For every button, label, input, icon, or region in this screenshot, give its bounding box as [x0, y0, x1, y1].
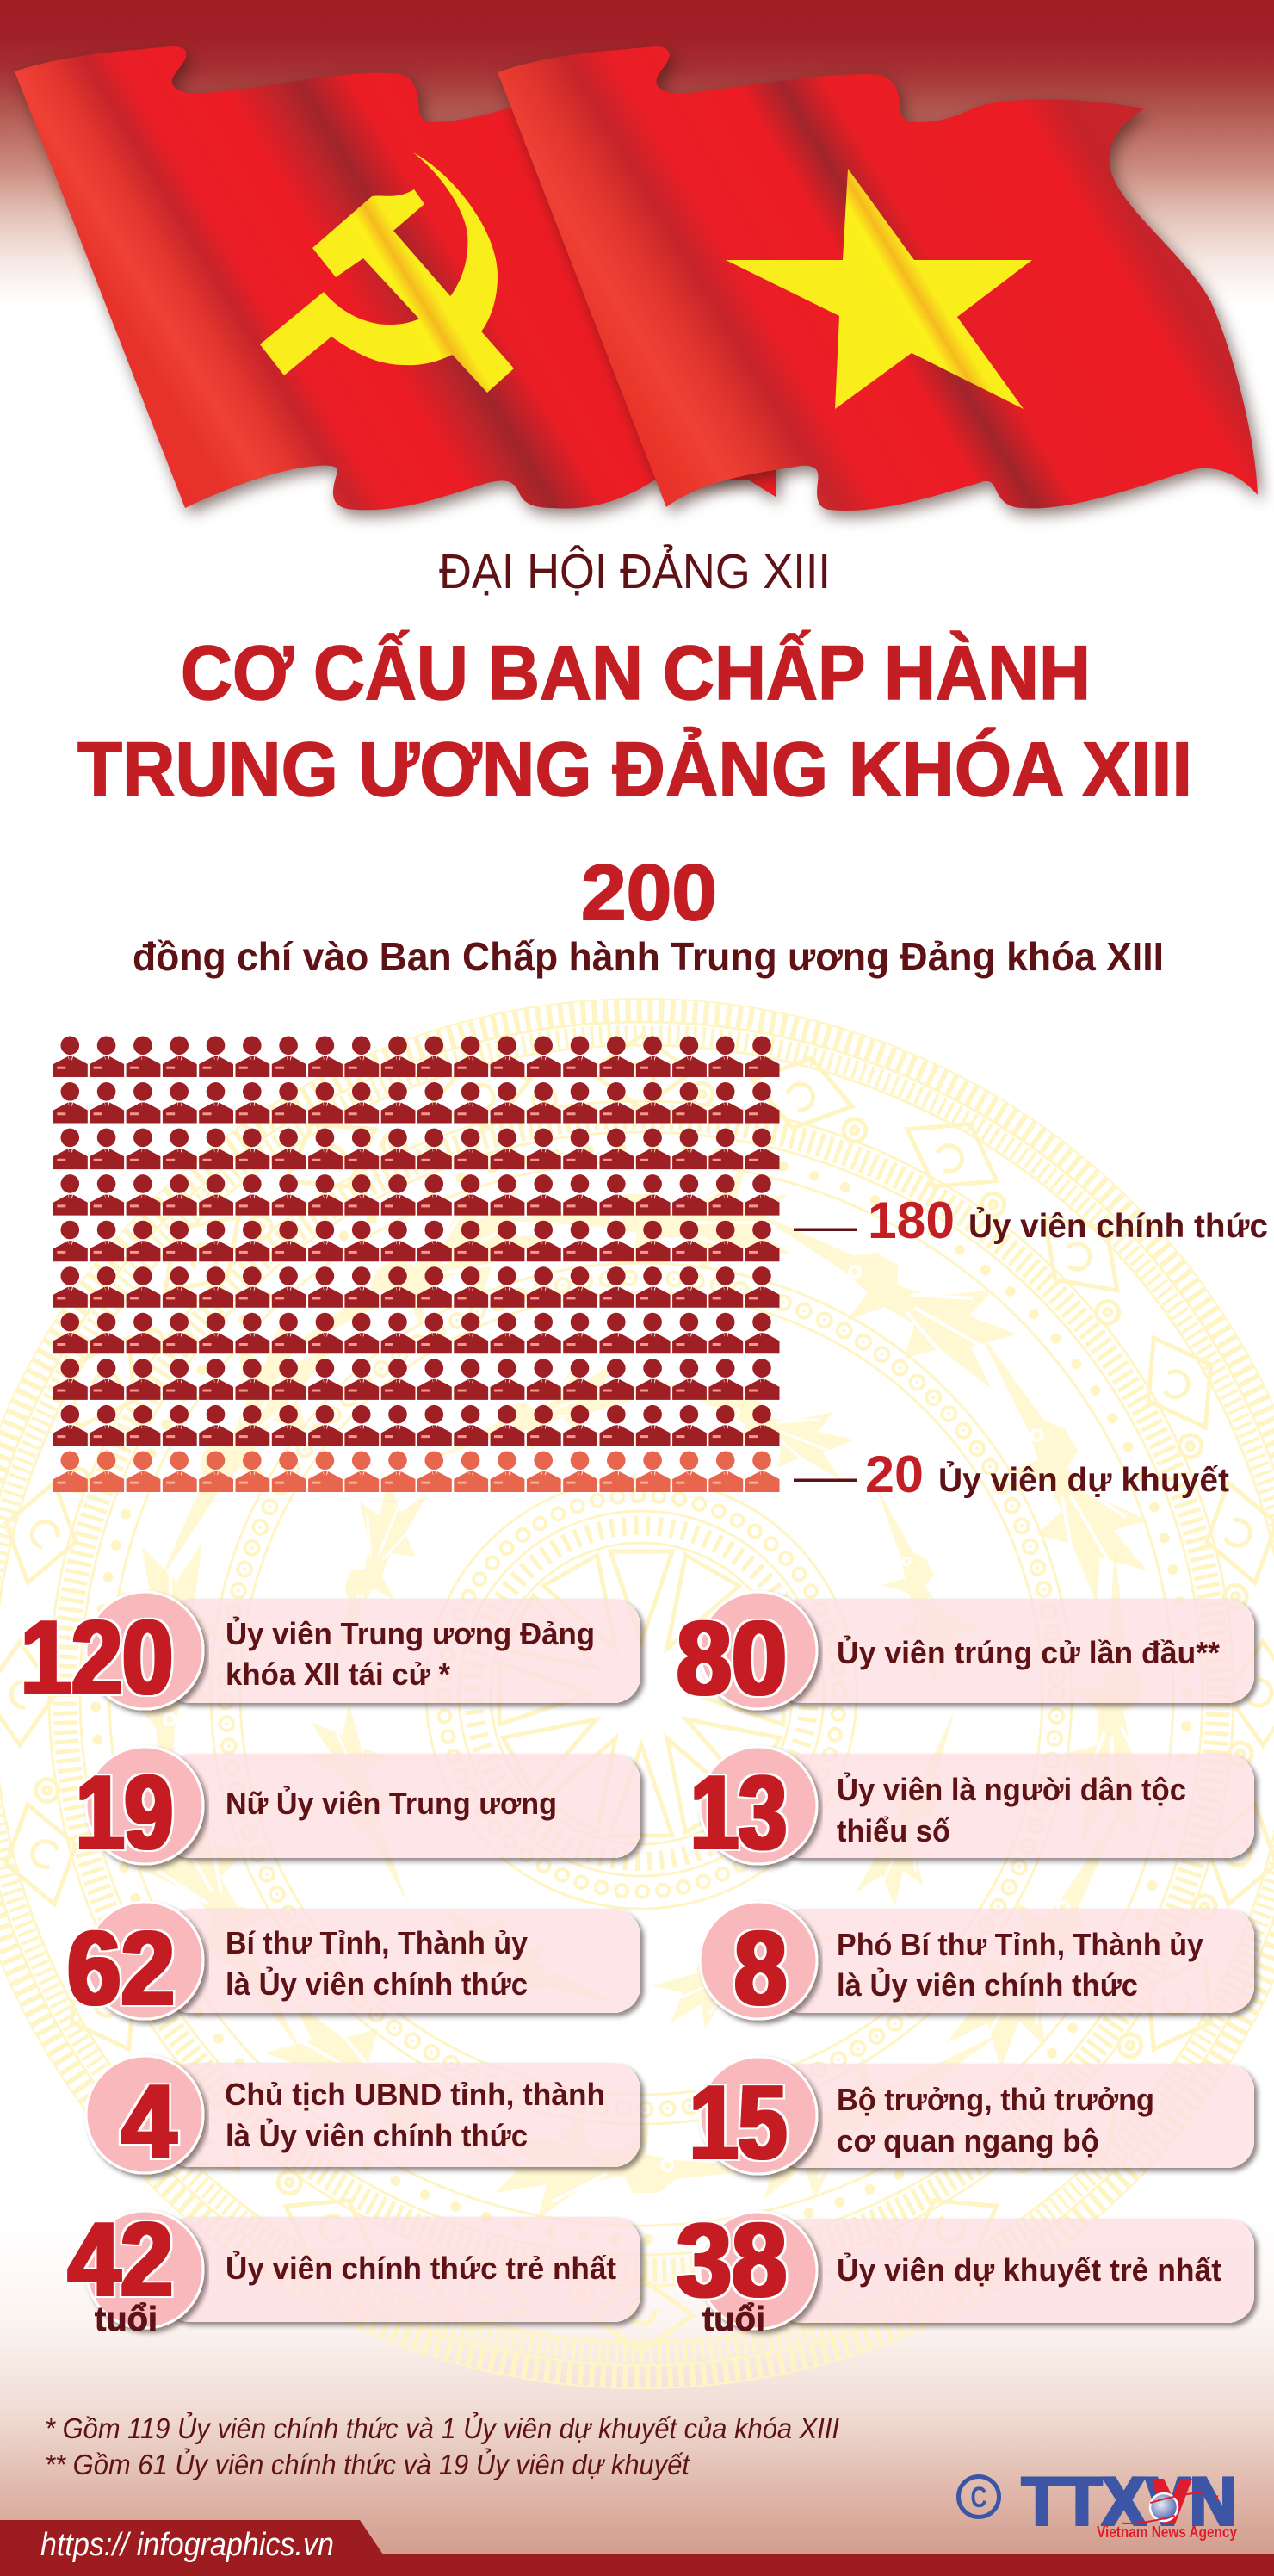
- footer bar with URL: [0, 2520, 1274, 2576]
- heading: congress label: ĐẠI HỘI ĐẢNG XIII: [439, 543, 831, 599]
- stat card: 15: Bộ trưởng, thủ trưởng: [837, 2082, 1154, 2117]
- stat card: 13: Ủy viên là người dân tộc: [837, 1771, 1186, 1807]
- stat card: 8: 8: [734, 1910, 787, 2027]
- stat card: 120: Ủy viên Trung ương Đảng: [226, 1615, 595, 1651]
- callout: 20 alternate members: 20: [865, 1446, 924, 1503]
- stat card: 80: [677, 1592, 1254, 1717]
- icon: copyright symbol: [959, 2476, 999, 2517]
- stat card: 42 years old: 42: [68, 2201, 173, 2318]
- footnotes: [45, 2412, 839, 2480]
- title: TRUNG ƯƠNG ĐẢNG KHÓA XIII: [77, 726, 1192, 812]
- footnotes: ** Gồm 61 Ủy viên chính thức và 19 Ủy viên dự khuyết: [45, 2448, 691, 2480]
- total count: [133, 849, 1164, 979]
- stat card: 15: [690, 2057, 1254, 2181]
- stat card: 8: là Ủy viên chính thức: [837, 1966, 1138, 2003]
- callout: 20 alternate members: Ủy viên dự khuyết: [938, 1461, 1229, 1499]
- flag: Communist Party flag with hammer and sickle: [15, 46, 776, 510]
- stat card: 62: [67, 1902, 640, 2027]
- total count: 200: [581, 849, 717, 937]
- icon: gold star: [726, 169, 1032, 409]
- stat card: 4: 4: [121, 2063, 176, 2180]
- stat card: 38 years old: tuổi: [702, 2300, 765, 2338]
- flag: Vietnam national flag with gold star: [498, 46, 1258, 511]
- callout: 20 alternate members: [794, 1446, 1229, 1503]
- stat card: 15: 15: [690, 2064, 787, 2181]
- footnotes: * Gồm 119 Ủy viên chính thức và 1 Ủy viên dự khuyết của khóa XIII: [45, 2412, 839, 2444]
- logo: TTXVN Vietnam News Agency: TTXVN: [1022, 2463, 1237, 2541]
- pictogram: 200 members grid: [53, 1037, 780, 1492]
- total count: đồng chí vào Ban Chấp hành Trung ương Đảng khóa XIII: [133, 934, 1164, 979]
- stat card: 80: Ủy viên trúng cử lần đầu**: [837, 1634, 1220, 1670]
- stat card: 38 years old: 38: [677, 2201, 787, 2319]
- title: [77, 629, 1192, 812]
- callout: 180 official members: 180: [868, 1192, 955, 1249]
- stat card: 120: khóa XII tái cử *: [226, 1656, 450, 1692]
- stat card: 62: Bí thư Tỉnh, Thành ủy: [226, 1925, 528, 1960]
- stat card: 62: 62: [67, 1910, 175, 2027]
- stat card: 38 years old: [677, 2201, 1254, 2338]
- title: CƠ CẤU BAN CHẤP HÀNH: [181, 629, 1091, 715]
- stat card: 8: Phó Bí thư Tỉnh, Thành ủy: [837, 1927, 1203, 1962]
- stat card: 42 years old: [68, 2201, 640, 2338]
- stat card: 13: thiểu số: [837, 1813, 950, 1848]
- stat card: 120: 120: [21, 1599, 173, 1716]
- pictogram row: 20 alternate members: [53, 1451, 780, 1492]
- footer bar with URL: https:// infographics.vn: [40, 2527, 334, 2563]
- stat card: 4: Chủ tịch UBND tỉnh, thành: [225, 2077, 605, 2112]
- logo: TTXVN Vietnam News Agency: Vietnam News Agency: [1097, 2523, 1237, 2541]
- stat card: 4: là Ủy viên chính thức: [226, 2117, 528, 2153]
- background: bronze drum pattern: [0, 999, 1274, 2388]
- stat card: 62: là Ủy viên chính thức: [226, 1966, 528, 2002]
- stat card: 19: Nữ Ủy viên Trung ương: [226, 1785, 557, 1821]
- stat card: 38 years old: Ủy viên dự khuyết trẻ nhất: [837, 2251, 1221, 2288]
- callout: 180 official members: Ủy viên chính thức: [968, 1207, 1268, 1245]
- stat card: 15: cơ quan ngang bộ: [837, 2123, 1099, 2158]
- stat card: 42 years old: tuổi: [95, 2300, 158, 2338]
- stat card: 19: [76, 1747, 640, 1871]
- stat card: 80: 80: [677, 1600, 787, 1717]
- stat card: 8: [700, 1902, 1254, 2027]
- stat card: 13: [690, 1747, 1254, 1871]
- icon: hammer and sickle: [260, 152, 514, 393]
- icon: copyright symbol: C: [971, 2481, 986, 2514]
- pictogram rows: 180 official members: [53, 1037, 780, 1446]
- stat card: 4: [86, 2056, 640, 2180]
- stat card: 42 years old: Ủy viên chính thức trẻ nhất: [226, 2250, 616, 2286]
- stat card: 19: 19: [76, 1754, 173, 1871]
- callout: 180 official members: [794, 1192, 1268, 1249]
- stat card: 13: 13: [690, 1754, 787, 1871]
- stat card: 120: [21, 1592, 640, 1716]
